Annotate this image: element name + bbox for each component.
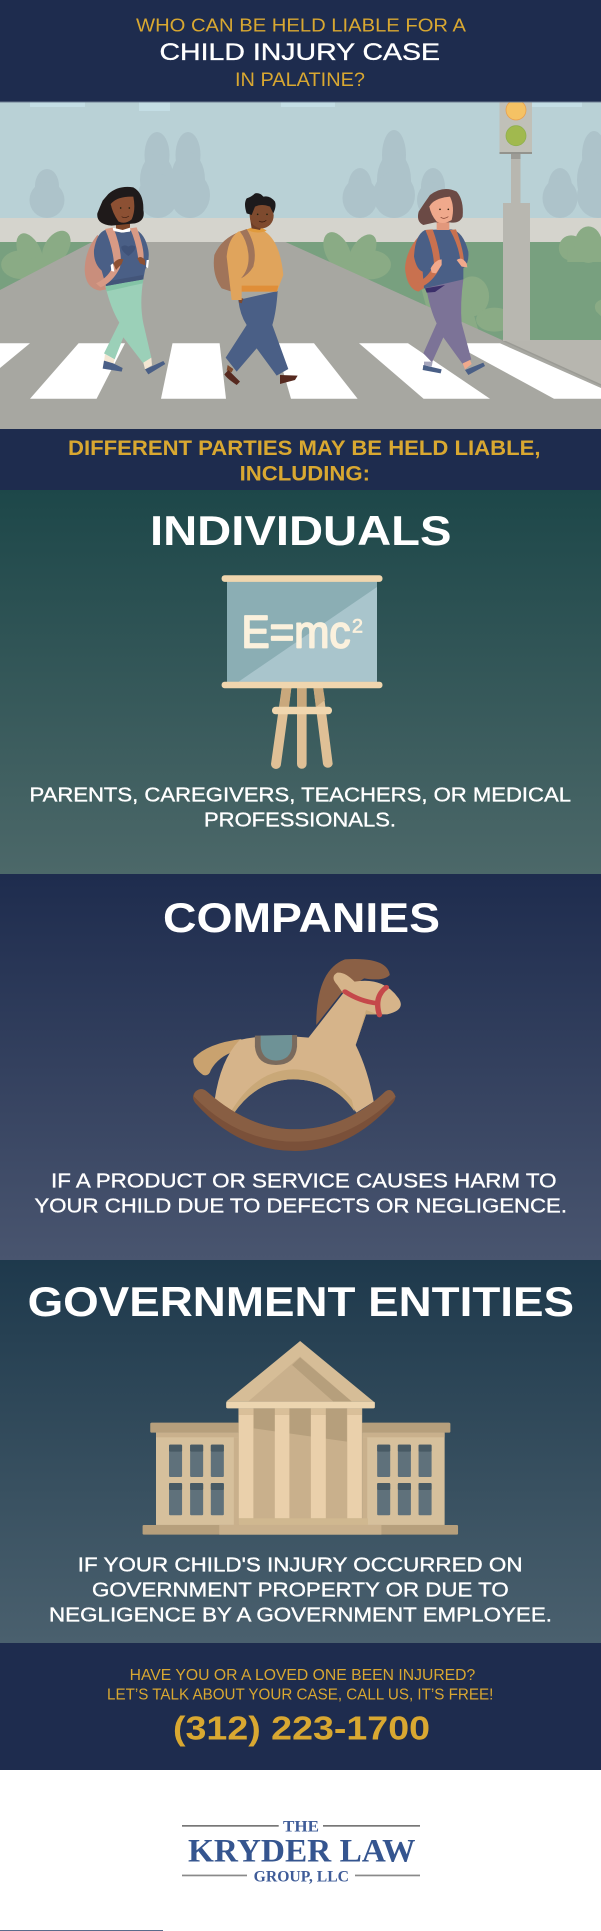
icon: rocking horse <box>193 959 401 1151</box>
title line one: WHO CAN BE HELD LIABLE FOR A <box>136 15 467 36</box>
icon: government building <box>143 1341 458 1535</box>
road <box>0 242 601 429</box>
title line two: CHILD INJURY CASE <box>160 39 440 66</box>
logo: the kryder law group <box>182 1819 420 1886</box>
bushes <box>1 226 601 333</box>
panel: individuals <box>0 490 601 874</box>
icon: easel with formula: 2 <box>352 617 363 638</box>
crosswalk stripes <box>0 343 601 399</box>
illustration: children at crosswalk <box>0 100 601 429</box>
grass <box>0 242 601 352</box>
bottom edge line <box>0 1930 163 1931</box>
subheading line one: DIFFERENT PARTIES MAY BE HELD LIABLE, <box>68 437 540 460</box>
description line two: PROFESSIONALS. <box>204 810 396 832</box>
description line two: YOUR CHILD DUE TO DEFECTS OR NEGLIGENCE. <box>34 1195 567 1217</box>
background trees <box>30 130 601 218</box>
prompt line one: HAVE YOU OR A LOVED ONE BEEN INJURED? <box>130 1667 476 1684</box>
child three: girl with brown hair <box>405 189 485 375</box>
logo: the kryder law group: THE <box>283 1819 319 1836</box>
heading: companies: COMPANIES <box>163 894 440 941</box>
description line one: IF YOUR CHILD'S INJURY OCCURRED ON <box>78 1555 523 1577</box>
child two: boy with orange sweater <box>214 193 298 385</box>
description line three: NEGLIGENCE BY A GOVERNMENT EMPLOYEE. <box>49 1605 552 1627</box>
subheading band <box>0 429 601 490</box>
sky highlights <box>30 102 582 111</box>
header band <box>0 0 601 102</box>
child one: girl with curly hair <box>85 187 165 374</box>
icon: easel with formula: E=mc <box>242 606 350 658</box>
call to action band <box>0 1643 601 1770</box>
title line three: IN PALATINE? <box>235 70 365 91</box>
logo: the kryder law group: GROUP, LLC <box>254 1869 349 1886</box>
wall <box>0 218 601 243</box>
description line one: IF A PRODUCT OR SERVICE CAUSES HARM TO <box>51 1170 556 1192</box>
subheading line two: INCLUDING: <box>240 463 370 486</box>
panel: companies <box>0 874 601 1260</box>
description line one: PARENTS, CAREGIVERS, TEACHERS, OR MEDICAL <box>30 785 571 807</box>
windows <box>169 1445 432 1515</box>
heading: individuals: INDIVIDUALS <box>150 507 452 554</box>
logo: the kryder law group: KRYDER LAW <box>188 1834 416 1870</box>
traffic light <box>500 100 532 341</box>
phone number: (312) 223-1700 <box>173 1709 430 1746</box>
sidewalk <box>502 340 601 385</box>
description line two: GOVERNMENT PROPERTY OR DUE TO <box>92 1580 509 1602</box>
icon: easel with formula <box>222 575 382 769</box>
panel: government entities <box>0 1260 601 1643</box>
prompt line two: LET’S TALK ABOUT YOUR CASE, CALL US, IT’S FREE! <box>107 1686 493 1703</box>
heading: government entities: GOVERNMENT ENTITIES <box>28 1278 574 1325</box>
